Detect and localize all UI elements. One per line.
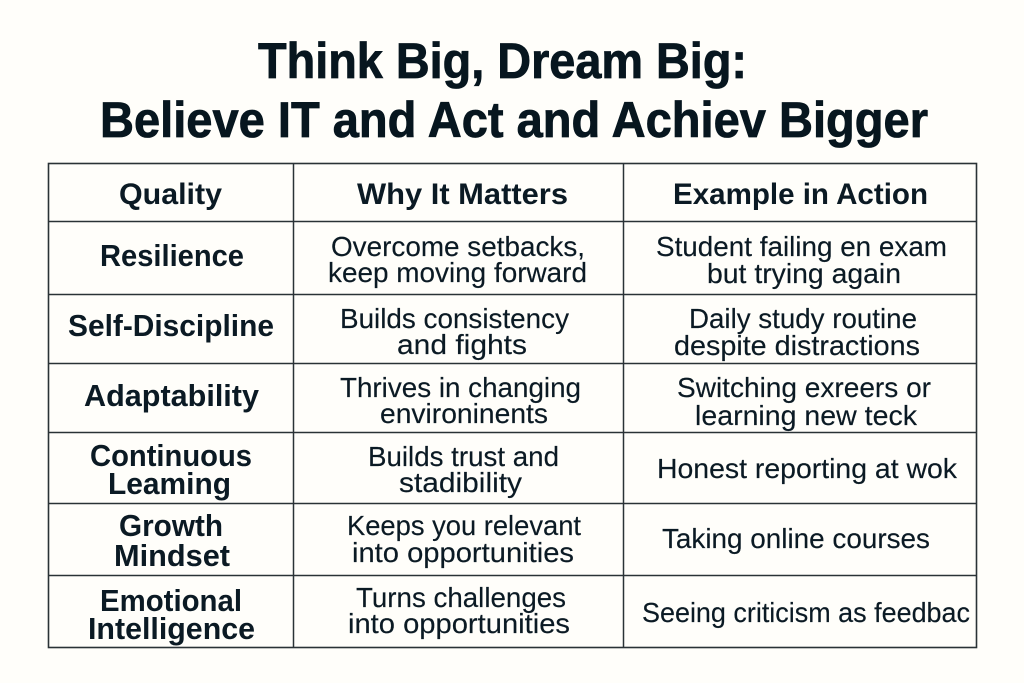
row: continuous learning <box>90 438 958 501</box>
title: Believe IT and Act and Achiev Bigger <box>100 92 928 148</box>
header row: Quality <box>119 178 222 211</box>
title <box>100 33 928 148</box>
header row: Example in Action <box>673 178 928 211</box>
table <box>48 163 976 648</box>
row: emotional intelligence: into opportunities <box>348 608 570 639</box>
row: resilience: but trying again <box>707 258 901 289</box>
row: self-discipline: Daily study routine <box>689 303 917 334</box>
row: growth mindset: Taking online courses <box>662 523 930 554</box>
row: continuous learning: Continuous <box>90 438 252 473</box>
header row: Why It Matters <box>357 178 568 211</box>
row: adaptability <box>84 372 931 431</box>
row: resilience: keep moving forward <box>328 257 587 288</box>
row: adaptability: Switching exreers or <box>677 372 931 403</box>
row: growth mindset: Keeps you relevant <box>347 510 581 541</box>
row: emotional intelligence: Seeing criticism as feedbac <box>642 597 970 628</box>
row: self-discipline: Builds consistency <box>340 303 569 334</box>
row: adaptability: environinents <box>380 398 548 429</box>
row: continuous learning: Builds trust and <box>368 441 559 472</box>
row: emotional intelligence: Turns challenges <box>356 582 566 613</box>
row: continuous learning: stadibility <box>399 467 522 498</box>
row: emotional intelligence: Emotional <box>100 583 242 618</box>
header row <box>119 178 928 211</box>
row: adaptability: Adaptability <box>84 378 260 413</box>
row: self-discipline: Self-Discipline <box>68 308 274 343</box>
row: emotional intelligence <box>88 582 970 646</box>
row: growth mindset <box>114 508 930 573</box>
row: resilience <box>100 231 947 289</box>
row: growth mindset: Growth <box>119 508 223 543</box>
row: growth mindset: into opportunities <box>352 537 574 568</box>
row: self-discipline: and fights <box>397 329 527 360</box>
row: self-discipline <box>68 303 920 361</box>
row: resilience: Resilience <box>100 238 244 273</box>
row: growth mindset: Mindset <box>114 538 230 573</box>
row: self-discipline: despite distractions <box>674 330 920 361</box>
title: Think Big, Dream Big: <box>258 33 747 89</box>
row: emotional intelligence: Intelligence <box>88 611 255 646</box>
row: adaptability: Thrives in changing <box>340 372 581 403</box>
table grid <box>48 163 976 648</box>
row: continuous learning: Honest reporting at wok <box>657 453 958 484</box>
row: adaptability: learning new teck <box>695 400 918 431</box>
row: resilience: Overcome setbacks, <box>331 231 585 262</box>
row: resilience: Student failing en exam <box>656 231 947 262</box>
row: continuous learning: Leaming <box>108 466 231 501</box>
